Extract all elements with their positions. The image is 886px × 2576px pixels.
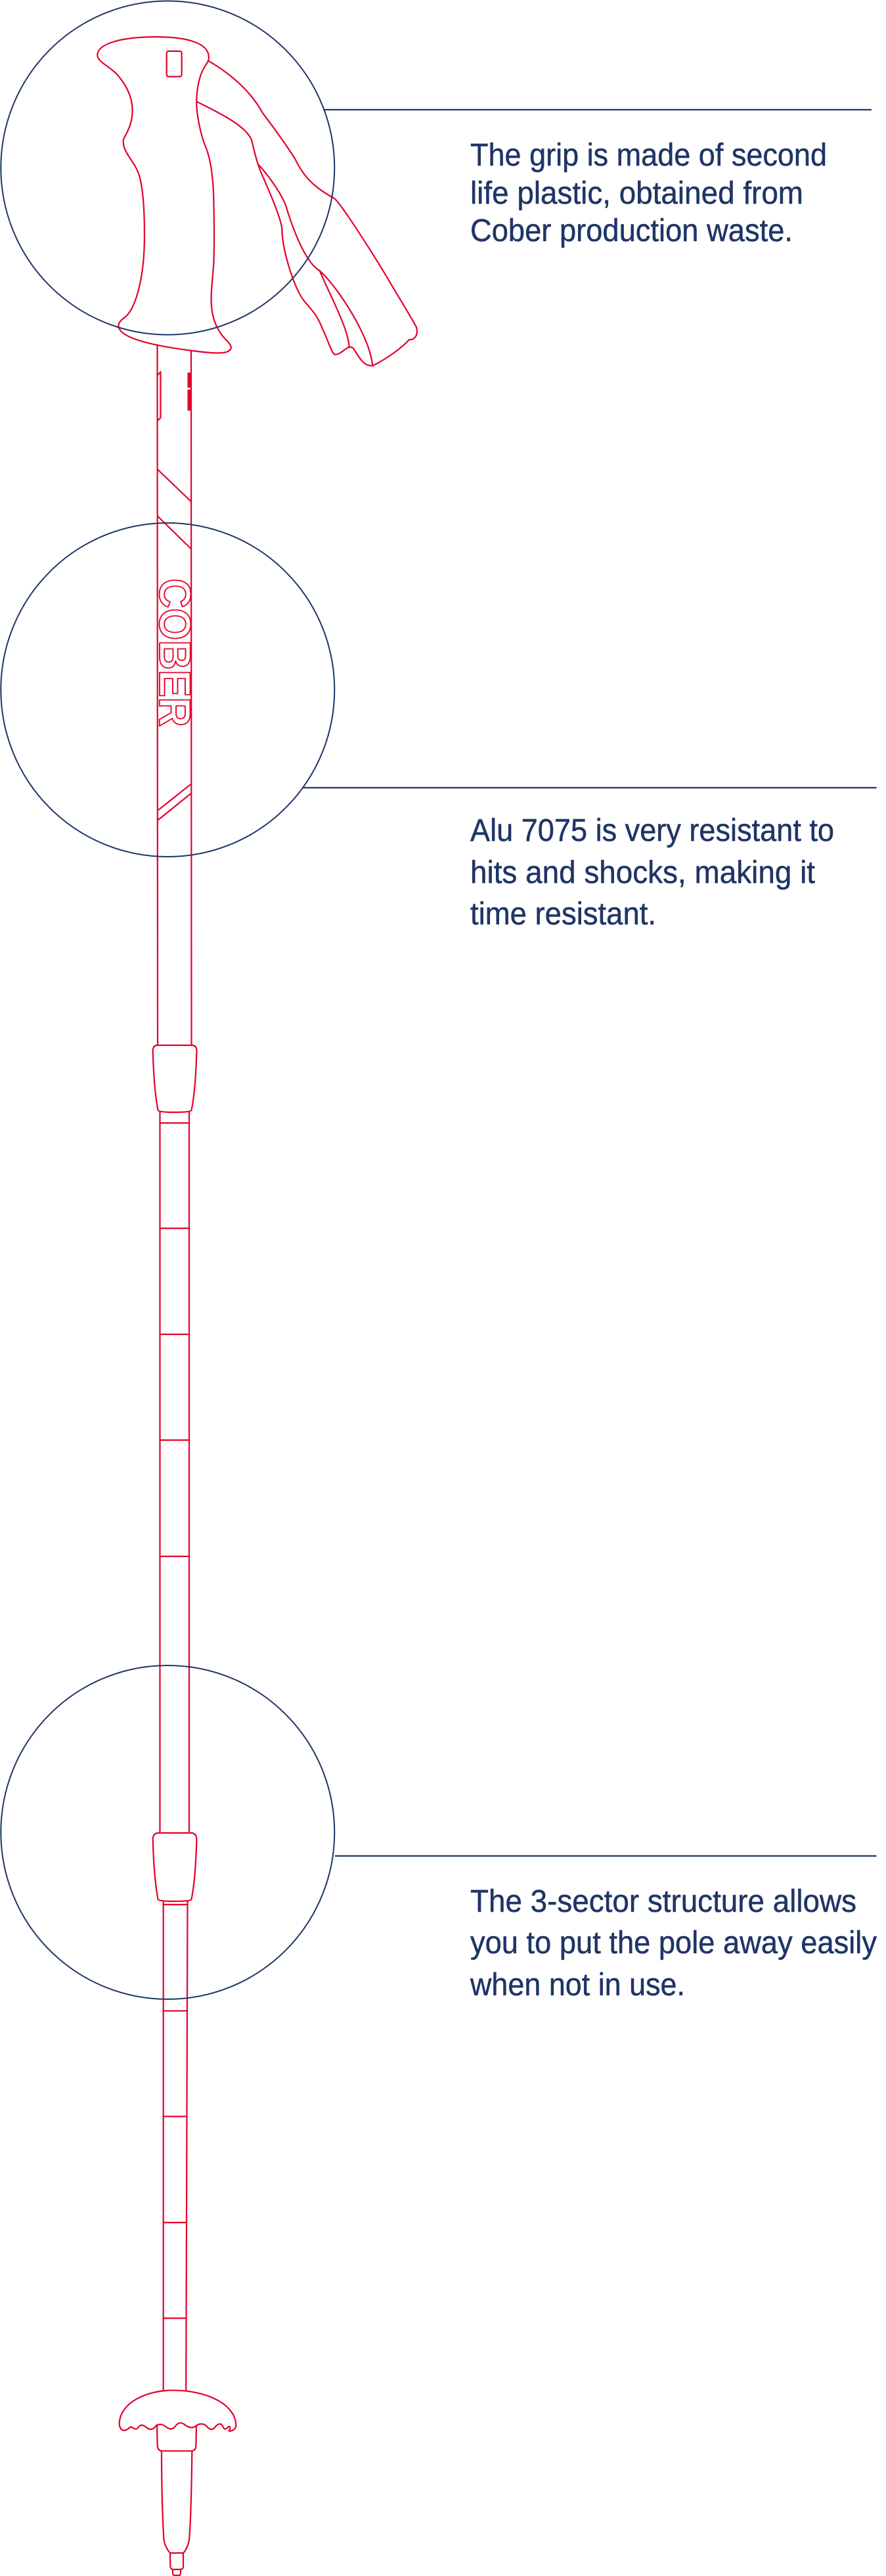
basket xyxy=(120,2390,236,2431)
middle shaft xyxy=(160,1112,189,1833)
pole drawing xyxy=(97,37,417,2575)
callout line: sectors xyxy=(335,1855,876,1857)
callout line: grip xyxy=(324,109,872,110)
text: shaft: Alu 7075 is very resistant to xyxy=(470,813,834,848)
callout line: shaft xyxy=(303,787,876,788)
text: grip: The grip is made of second xyxy=(470,138,827,173)
text: sectors: when not in use. xyxy=(470,1968,685,2002)
text: grip: Cober production waste. xyxy=(470,214,793,248)
callout circle: shaft xyxy=(1,523,334,857)
text: sectors: The 3-sector structure allows xyxy=(470,1884,856,1919)
upper collar xyxy=(153,1045,197,1112)
text: shaft: time resistant. xyxy=(470,897,656,932)
callout circle: grip xyxy=(1,1,334,335)
wrist strap xyxy=(197,61,417,366)
callout circle: sectors xyxy=(1,1665,334,1999)
pole tip xyxy=(157,2425,196,2575)
brand name on shaft: COBER xyxy=(150,578,200,727)
lower shaft xyxy=(164,1901,188,2390)
grip handle xyxy=(97,37,231,353)
lower collar xyxy=(153,1833,197,1901)
upper shaft xyxy=(158,345,192,1045)
text: shaft: hits and shocks, making it xyxy=(470,855,815,890)
text: grip: life plastic, obtained from xyxy=(470,176,803,211)
